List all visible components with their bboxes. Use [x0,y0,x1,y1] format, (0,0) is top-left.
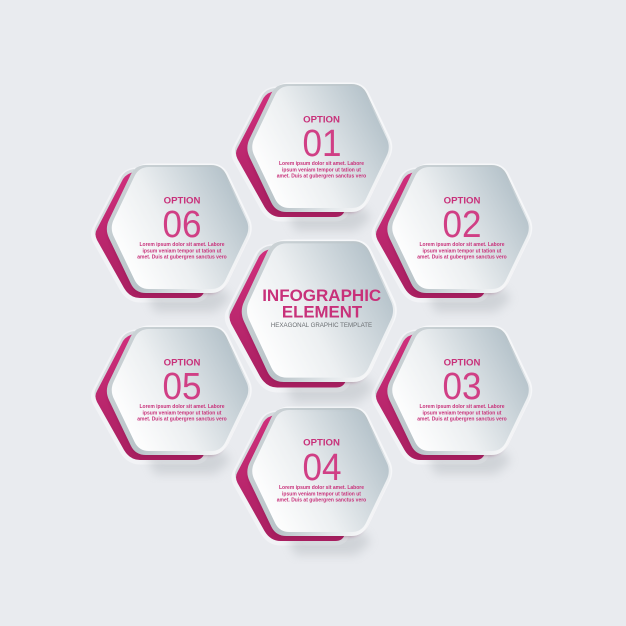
text: option 01: OPTION [303,114,340,126]
text: option 02: amet. Duis at gubergren sanctus vero [417,255,507,261]
text: option 03: 03 [442,366,482,408]
hexagon 01 [235,84,391,231]
text: option 06: ipsum veniam tempor ut tation ut [143,248,222,254]
text: option 05: 05 [162,366,202,408]
hexagon 02 [375,165,531,312]
hexagon 04 [235,408,391,555]
text: option 04: ipsum veniam tempor ut tation ut [282,491,361,497]
text: option 02 [417,196,507,261]
text: option 01 [277,114,366,180]
hexagon 05 [94,327,250,474]
text: option 02: 02 [442,204,482,246]
hexagon 03 [375,327,531,474]
panel: center [229,241,395,403]
text: option 01: amet. Duis at gubergren sanctus vero [277,174,366,180]
text: option 03: Lorem ipsum dolor sit amet. Labore [419,404,505,410]
text: option 03: OPTION [444,358,480,368]
hexagon 06 [94,165,250,312]
text: option 06: Lorem ipsum dolor sit amet. Labore [139,242,225,248]
text: option 05 [137,358,227,423]
text: option 04: Lorem ipsum dolor sit amet. Labore [279,485,364,491]
text: option 05: amet. Duis at gubergren sanctus vero [137,417,227,423]
text: option 05: ipsum veniam tempor ut tation ut [143,410,222,416]
text: option 02: Lorem ipsum dolor sit amet. Labore [419,242,505,248]
text: option 02: ipsum veniam tempor ut tation ut [423,248,502,254]
title [262,286,381,322]
text: option 01: 01 [302,123,342,165]
panel: option 03 [375,327,531,474]
text: option 04 [277,438,366,504]
text: option 06: 06 [162,204,202,246]
subtitle: HEXAGONAL GRAPHIC TEMPLATE [271,322,372,329]
panel: option 05 [94,327,250,474]
text: option 04: OPTION [303,438,340,448]
text: option 05: OPTION [164,358,200,368]
panel: option 01 [235,84,391,231]
text: option 01: Lorem ipsum dolor sit amet. Labore [279,161,364,167]
title: ELEMENT [282,302,363,322]
text: option 04: amet. Duis at gubergren sanctus vero [277,498,366,504]
text: option 06 [137,196,227,261]
text: option 06: amet. Duis at gubergren sanctus vero [137,255,227,261]
panel: option 04 [235,408,391,555]
text: option 06: OPTION [164,196,200,206]
panel: option 06 [94,165,250,312]
text: option 03: ipsum veniam tempor ut tation ut [423,410,502,416]
title: INFOGRAPHIC [262,286,381,305]
text: option 04: 04 [302,447,342,489]
text: option 03 [417,358,507,423]
text: option 05: Lorem ipsum dolor sit amet. Labore [139,404,225,410]
panel: option 02 [375,165,531,312]
text: option 03: amet. Duis at gubergren sanctus vero [417,417,507,423]
text: option 01: ipsum veniam tempor ut tation ut [282,167,361,173]
center hexagon [229,241,395,403]
text: option 02: OPTION [444,196,480,206]
